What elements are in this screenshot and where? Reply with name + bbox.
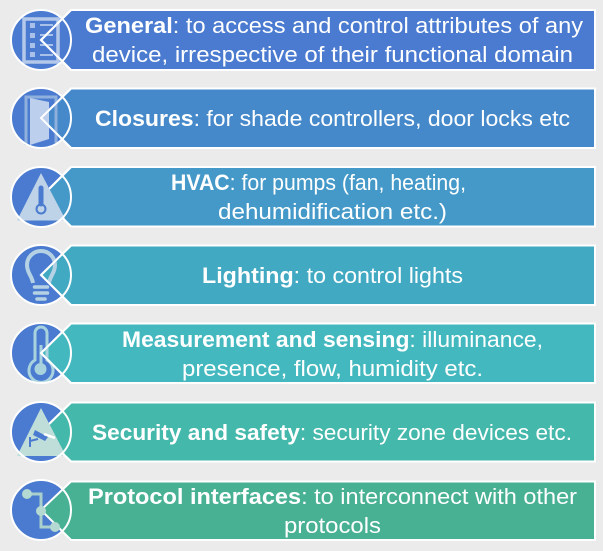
text: Lighting: Lighting: to control lights: [202, 263, 463, 288]
icon: connected nodes: [22, 489, 60, 532]
text: Security and safety: Security and safety : security zone devices etc.: [92, 420, 572, 445]
row: General: [11, 10, 595, 70]
icon: warning triangle with thermometer: [17, 167, 71, 226]
text: HVAC: HVAC: for pumps (fan, heating,: [171, 170, 466, 195]
row: Measurement and sensing: [11, 323, 595, 383]
row: Security and safety: [11, 402, 595, 462]
text: Measurement and sensing: [122, 327, 543, 381]
text: Protocol interfaces: [88, 484, 577, 538]
text: HVAC: [171, 170, 466, 224]
text: HVAC: dehumidification etc.): [218, 199, 447, 224]
icon: door: [26, 88, 71, 148]
text: Measurement and sensing: presence, flow, humidity etc.: [182, 356, 483, 381]
icon: light bulb: [27, 246, 71, 305]
icon: checklist: [24, 10, 71, 70]
row: Lighting: [11, 245, 595, 305]
row: Closures: [11, 88, 595, 148]
text: General: device, irrespective of their functional domain: [92, 42, 573, 67]
row: Protocol interfaces: [11, 480, 595, 540]
text: General: General : to access and control attributes of any: [85, 13, 583, 38]
text: General: [85, 13, 583, 67]
text: Protocol interfaces: protocols: [284, 513, 381, 538]
row: HVAC: [11, 167, 595, 227]
icon: warning triangle with security camera: [17, 402, 71, 462]
icon: thermometer: [29, 324, 71, 383]
text: Protocol interfaces: Protocol interfaces : to interconnect with other: [88, 484, 577, 509]
text: Measurement and sensing: Measurement and sensing : illuminance,: [122, 327, 543, 352]
text: Closures: Closures: for shade controllers, door locks etc: [95, 106, 570, 131]
